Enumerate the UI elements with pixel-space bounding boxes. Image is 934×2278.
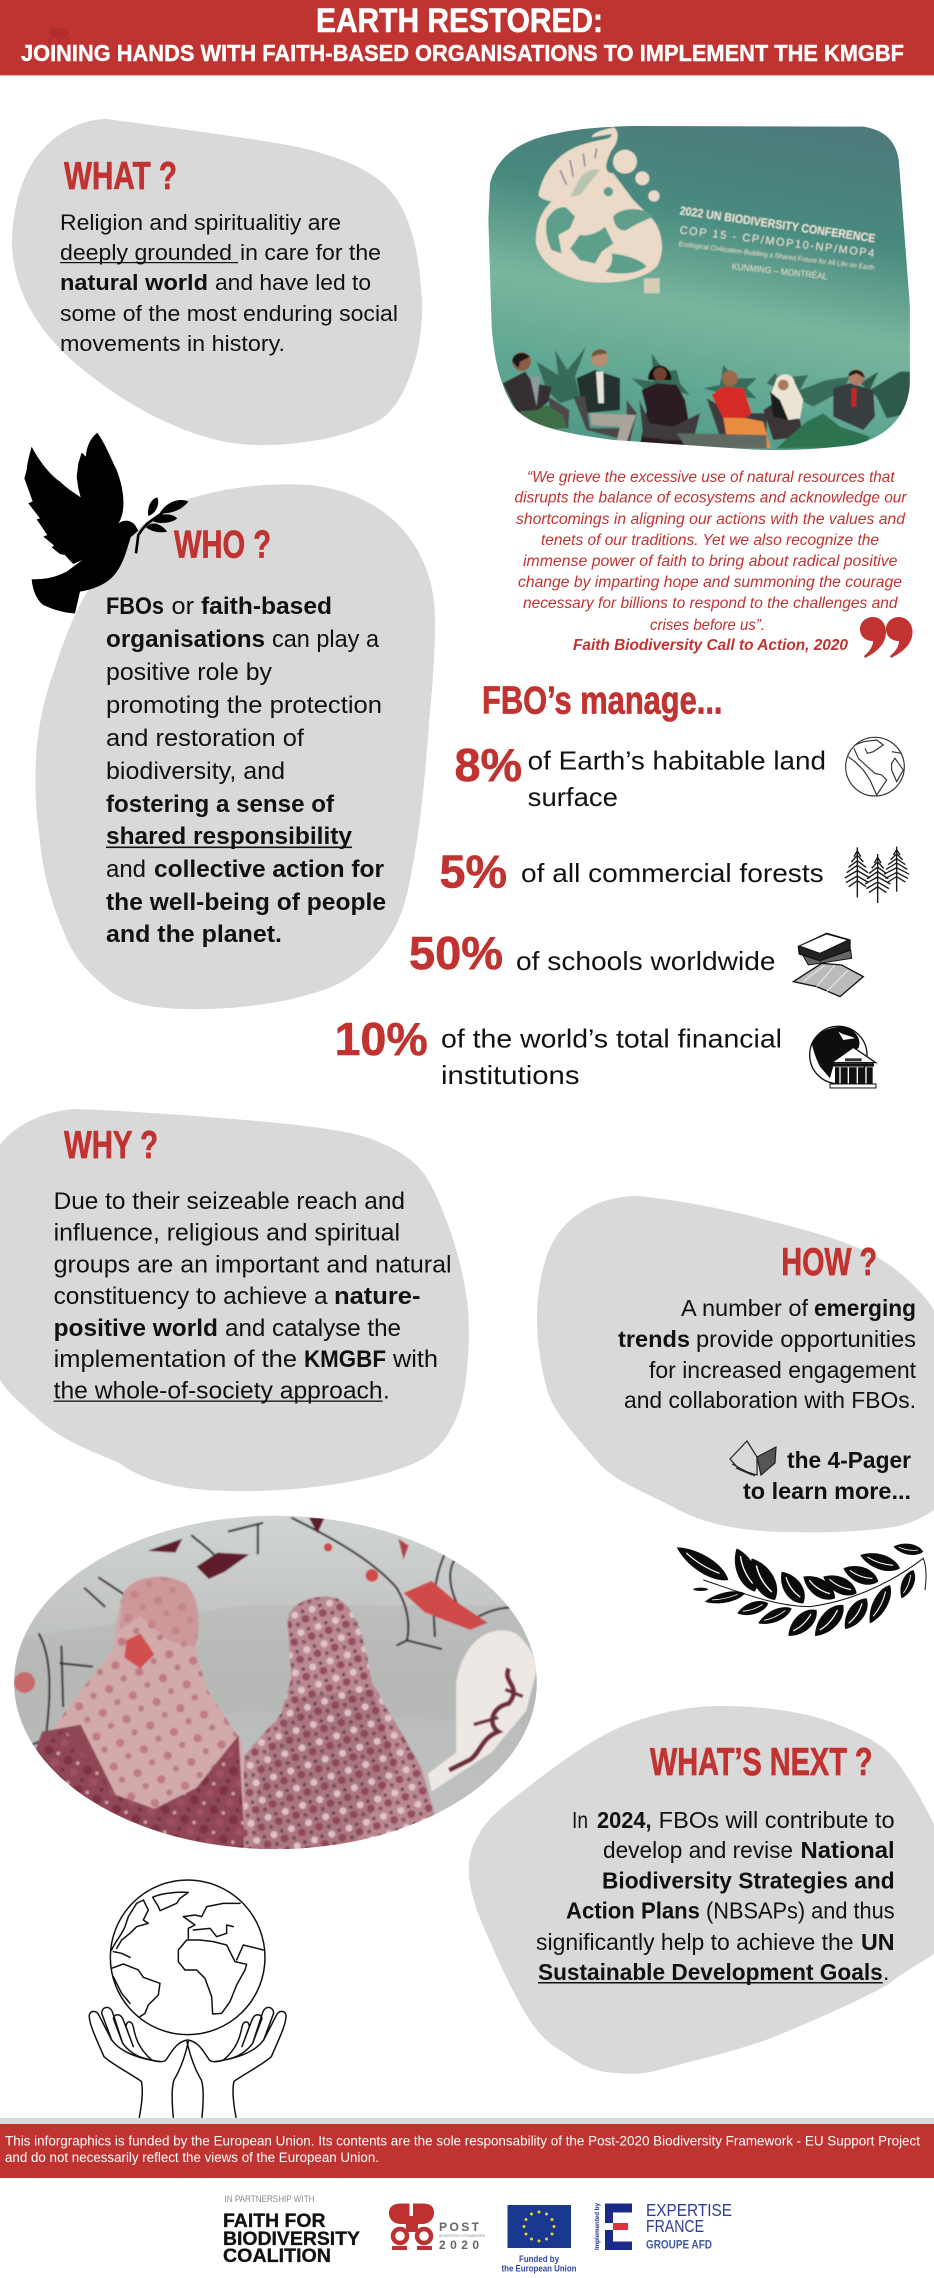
stat: 5% forests: 5%	[440, 846, 507, 898]
heading: who: WHO ?	[174, 524, 271, 566]
text: who body: collective action for	[154, 856, 384, 883]
text: how body: trends	[618, 1326, 690, 1352]
icon: books	[793, 933, 863, 997]
text: why body: .	[383, 1378, 390, 1404]
logo: expertise france	[594, 2200, 732, 2252]
text: why body: positive world	[54, 1315, 218, 1342]
text: who body	[106, 593, 386, 948]
text: why body: nature-	[334, 1283, 421, 1310]
logo: expertise france: FRANCE	[646, 2216, 704, 2236]
photo text: COP 15 - CP/MOP10-NP/MOP4	[679, 224, 875, 260]
icon: laurel branch	[672, 1540, 926, 1642]
text: what's next body: Action Plans	[566, 1898, 700, 1924]
branches	[23, 1518, 523, 1749]
person 2	[573, 349, 637, 442]
photo: women in floral headscarves	[14, 1516, 537, 1850]
panel: why	[0, 1109, 469, 1491]
photo text: KUNMING – MONTRÉAL	[731, 261, 828, 281]
text: 4-pager note: the 4-Pager	[787, 1447, 911, 1473]
heading: FBO's manage: FBO’s manage...	[482, 680, 722, 722]
icon: globe	[846, 737, 904, 796]
quote: crises before us”.	[650, 617, 765, 634]
photo text	[678, 203, 876, 281]
title: EARTH RESTORED:	[316, 2, 603, 40]
text: 4-pager note	[743, 1447, 911, 1504]
stat: 8% land: 8%	[454, 739, 522, 791]
text: why body: with	[392, 1346, 438, 1373]
icon: trees	[845, 847, 909, 903]
text: who body: the well-being of people	[106, 889, 386, 916]
text: why body: constituency to achieve a	[54, 1283, 328, 1310]
photo text: 2022 UN BIODIVERSITY CONFERENCE	[679, 203, 876, 245]
quote: change by imparting hope and summoning the courage	[518, 574, 902, 591]
logo: post 2020: 2020	[439, 2238, 479, 2252]
quote: necessary for billions to respond to the challenges and	[523, 595, 899, 612]
text: how body: A number of	[681, 1295, 809, 1321]
plants: foreground	[518, 405, 870, 448]
logo: european union flag	[502, 2205, 577, 2274]
icon: hands holding globe	[89, 1880, 286, 2117]
logo: post 2020: BIODIVERSITY FRAMEWORK	[439, 2234, 486, 2238]
quote: immense power of faith to bring about radical positive	[523, 553, 898, 570]
text: what body: some of the most enduring social	[60, 301, 398, 326]
quote: shortcomings in aligning our actions with the values and	[516, 511, 906, 528]
quote: tenets of our traditions. Yet we also recognize the	[541, 532, 879, 549]
text: what's next body	[536, 1807, 895, 1985]
text: why body: KMGBF	[304, 1346, 386, 1373]
text: what body: natural world	[60, 270, 208, 295]
text: what's next body: UN	[861, 1929, 895, 1955]
text: what body: deeply grounded	[60, 240, 232, 265]
text: who body: can play a	[272, 626, 379, 653]
text: what body: and have led to	[215, 270, 371, 295]
text: what body	[60, 210, 398, 356]
heading: why: WHY ?	[64, 1124, 158, 1167]
person 5	[763, 374, 803, 440]
text: what's next body: In	[572, 1807, 588, 1833]
logo: faith for biodiversity coalition	[223, 2194, 360, 2267]
logo: faith for biodiversity coalition: BIODIVERSITY	[223, 2229, 360, 2250]
heading: what: WHAT ?	[64, 155, 177, 198]
text: how body: emerging	[814, 1295, 916, 1321]
header banner	[0, 0, 934, 76]
text: how body: for increased engagement	[649, 1357, 917, 1383]
figure: middle scarf	[244, 1597, 435, 1858]
logo: faith for biodiversity coalition: FAITH FOR	[223, 2211, 326, 2232]
quote: disrupts the balance of ecosystems and acknowledge our	[514, 490, 907, 506]
text: how body: and collaboration with FBOs.	[624, 1387, 916, 1413]
text: what body: Religion and spiritualitiy are	[60, 210, 341, 235]
footer disclaimer: and do not necessarily reflect the views of the European Union.	[5, 2150, 379, 2165]
stat: 8% land: surface	[528, 782, 618, 812]
logo: european union flag: Funded by	[519, 2254, 560, 2265]
text: who body: positive role by	[106, 659, 273, 686]
logo: faith for biodiversity coalition: IN PARTNERSHIP WITH	[224, 2194, 314, 2204]
panel: what	[12, 119, 422, 445]
text: who body: and	[106, 856, 146, 883]
logo: expertise france: EXPERTISE	[646, 2200, 732, 2220]
stat: 5% forests: of all commercial forests	[521, 858, 824, 888]
text: who body: organisations	[106, 626, 265, 653]
logo: faith for biodiversity coalition: COALITION	[223, 2246, 331, 2267]
stat: 10% financial: institutions	[441, 1060, 580, 1090]
text: who body: fostering a sense of	[106, 791, 335, 818]
emblem: peacock logo	[536, 127, 662, 283]
person 6	[833, 369, 875, 430]
text: what's next body: (NBSAPs) and thus	[706, 1898, 895, 1924]
icon: quotation mark	[860, 617, 912, 658]
text: who body: promoting the protection	[106, 692, 382, 719]
text: why body: implementation of the	[54, 1346, 297, 1373]
logo: expertise france: GROUPE AFD	[646, 2240, 712, 2252]
footer disclaimer	[0, 2118, 934, 2178]
quote attribution: Faith Biodiversity Call to Action, 2020	[573, 637, 848, 654]
text: why body: groups are an important and natural	[54, 1252, 452, 1278]
text: what's next body: National	[800, 1837, 895, 1863]
text: what's next body: Sustainable Development Goals	[538, 1959, 883, 1985]
text: what's next body: significantly help to achieve the	[536, 1929, 854, 1955]
icon: open book	[730, 1441, 776, 1476]
text: why body	[54, 1188, 452, 1404]
person 3	[639, 366, 700, 448]
quote: “We grieve the excessive use of natural resources that	[527, 469, 895, 486]
stat: 10% financial: 10%	[335, 1013, 428, 1065]
figure: right scarf	[428, 1630, 536, 1791]
text: why body: the whole-of-society approach	[54, 1378, 383, 1404]
stat: 8% land	[454, 737, 904, 812]
panel: what's next	[469, 1706, 934, 2074]
quote	[514, 469, 907, 654]
text: how body	[618, 1295, 917, 1413]
leaves	[147, 1518, 409, 1579]
text: why body: and catalyse the	[225, 1315, 401, 1342]
stat: 50% schools: of schools worldwide	[516, 946, 776, 976]
stat: 5% forests	[440, 846, 909, 903]
icon: bank and globe	[810, 1026, 876, 1088]
text: what's next body: .	[883, 1959, 889, 1985]
text: who body: and the planet.	[106, 921, 282, 948]
text: what's next body: FBOs will contribute to	[659, 1807, 895, 1833]
logo: post 2020: POST	[439, 2220, 480, 2234]
logo: european union flag: the European Union	[502, 2264, 577, 2274]
plants	[537, 347, 910, 418]
photo: conference panel	[480, 120, 920, 460]
photo text: Ecological Civilization-Building a Shared Future for All Life on Earth	[678, 241, 875, 272]
text: what's next body: 2024,	[597, 1807, 652, 1833]
text: 4-pager note: to learn more...	[743, 1478, 911, 1504]
text: who body: and restoration of	[106, 725, 304, 752]
text: how body: provide opportunities	[696, 1326, 916, 1352]
logo: expertise france: Implemented by	[594, 2203, 601, 2250]
text: who body: FBOs	[106, 593, 164, 620]
text: what body: in care for the	[240, 240, 381, 265]
text: who body: or	[172, 593, 194, 620]
person 4	[677, 370, 771, 448]
faint logo mark	[49, 28, 69, 46]
stat: 50% schools	[409, 927, 863, 997]
text: what's next body: Biodiversity Strategies and	[602, 1868, 895, 1894]
text: what body: movements in history.	[60, 331, 285, 356]
text: who body: faith-based	[201, 593, 332, 620]
stat: 10% financial: of the world’s total financial	[441, 1024, 782, 1054]
stat: 10% financial	[335, 1013, 876, 1090]
icon: dove with olive branch	[24, 433, 188, 613]
text: what's next body: develop and revise	[603, 1837, 793, 1863]
text: why body: influence, religious and spiritual	[54, 1220, 400, 1246]
logo: post 2020	[389, 2203, 486, 2252]
panel: who	[35, 484, 435, 1009]
emblem cut-outs	[546, 169, 653, 273]
text: who body: shared responsibility	[106, 823, 352, 850]
stat: 8% land: of Earth’s habitable land	[528, 746, 826, 776]
figure: left scarf	[53, 1577, 244, 1818]
stat: 50% schools: 50%	[409, 927, 503, 979]
footer disclaimer: This inforgraphics is funded by the European Union. Its contents are the sole responsability of the Post-2020 Biodiversity Framework - EU Support Project	[5, 2134, 920, 2148]
panel: how	[537, 1196, 934, 1532]
text: why body: Due to their seizeable reach and	[54, 1188, 405, 1215]
heading: how: HOW ?	[781, 1241, 877, 1284]
text: who body: biodiversity, and	[106, 758, 285, 785]
person 1	[503, 352, 569, 428]
